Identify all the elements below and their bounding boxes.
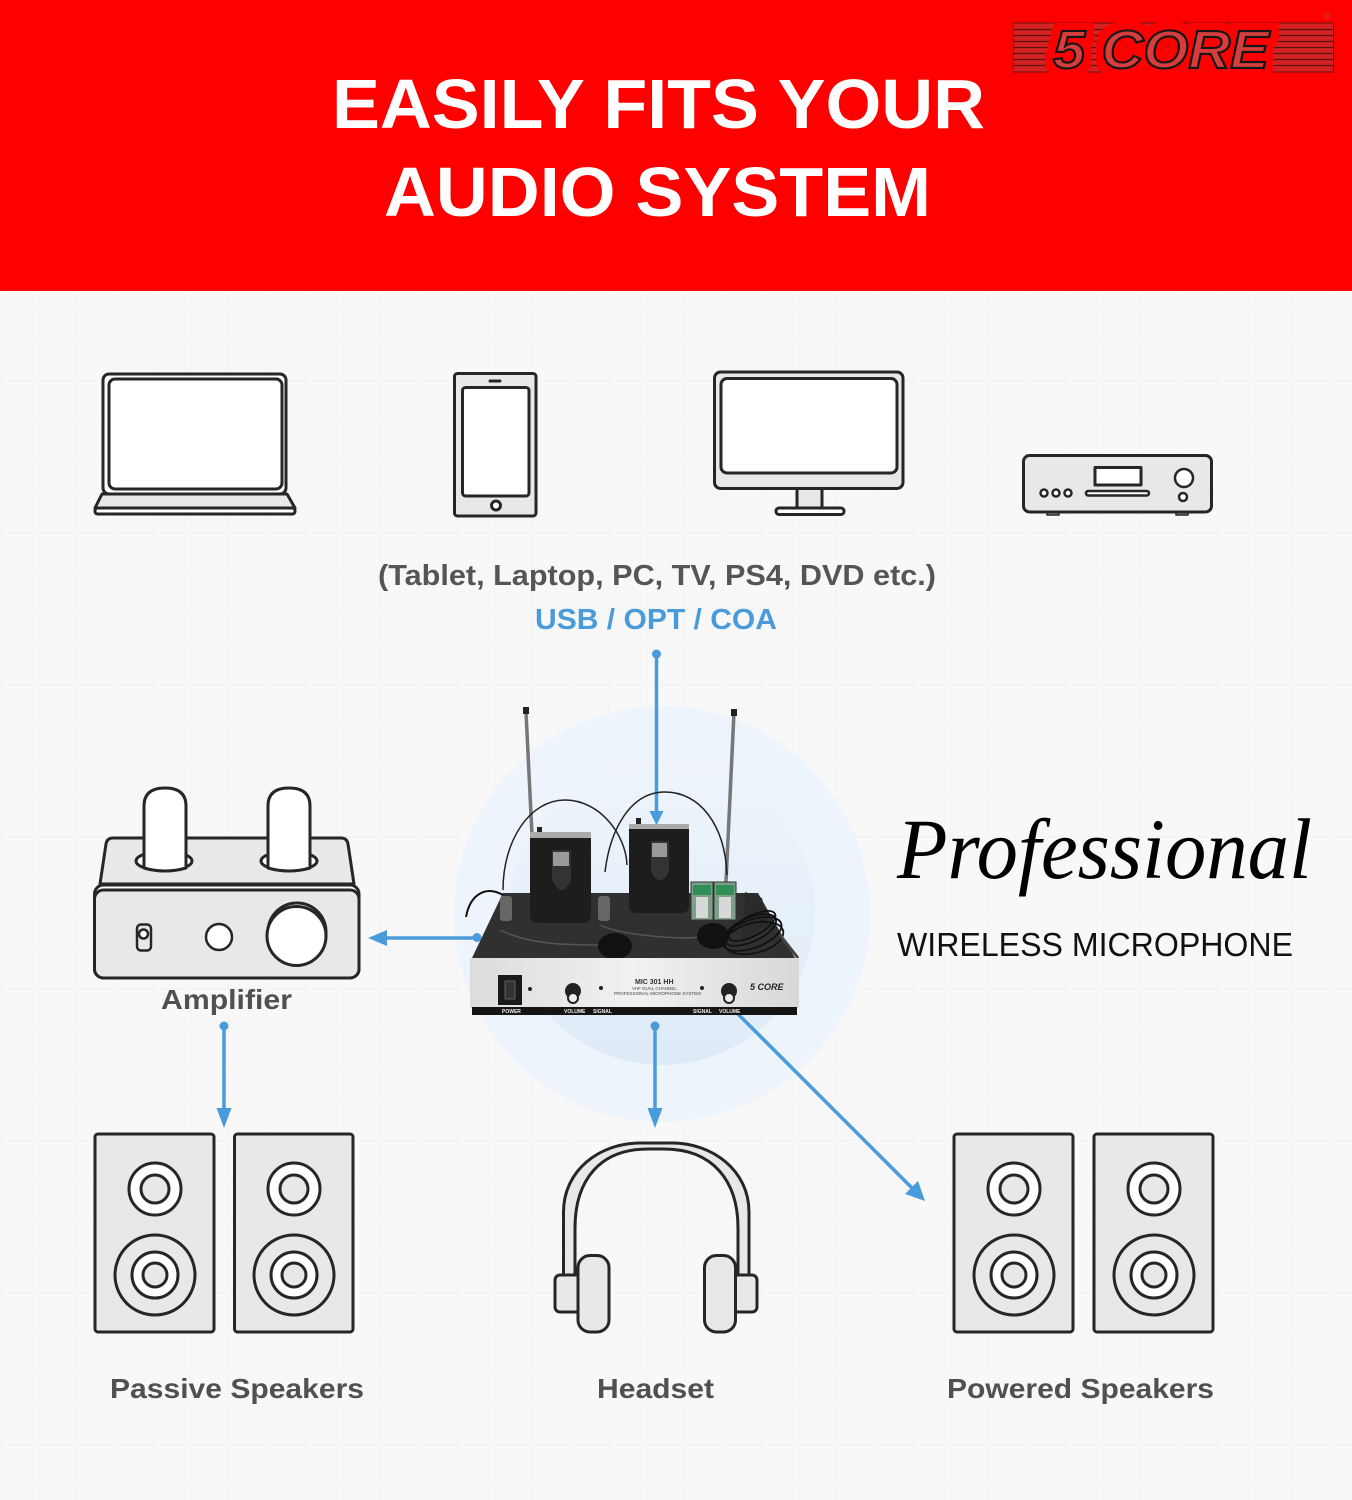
icon: laptop [95, 374, 295, 514]
arrowhead over transmitter [650, 811, 664, 825]
receiver front panel [470, 958, 799, 1015]
receiver front panel: POWER [502, 1009, 521, 1015]
title: EASILY FITS YOUR [332, 65, 985, 143]
receiver front panel: VHF DUAL CHANNEL [632, 986, 677, 991]
bodypack transmitter left [530, 827, 591, 923]
receiver front panel: SIGNAL [693, 1009, 712, 1015]
receiver product photo [466, 707, 799, 1015]
receiver front panel: 5 CORE [750, 982, 785, 992]
blue glow circle behind receiver [454, 706, 870, 1122]
icon: powered speakers [954, 1134, 1213, 1332]
right speaker [1094, 1134, 1213, 1332]
arrow: source to receiver [650, 650, 664, 825]
logo: 5 Core: ® [1323, 11, 1331, 23]
icon: passive speakers [95, 1134, 353, 1332]
tagline: Professional: Professional [896, 801, 1312, 897]
arrow: amplifier to passive speakers [216, 1022, 232, 1128]
icon: monitor [714, 372, 903, 514]
label: headset: Headset [597, 1373, 714, 1404]
icon: headset [555, 1143, 757, 1332]
label: passive speakers: Passive Speakers [110, 1373, 364, 1404]
right speaker [234, 1134, 353, 1332]
receiver top [472, 893, 795, 958]
header banner [0, 0, 1352, 291]
title [332, 65, 985, 231]
icon: DVD player [1024, 456, 1212, 515]
left speaker [95, 1134, 214, 1332]
logo: 5 Core: 5 CORE [1053, 20, 1271, 80]
antennas [523, 707, 737, 882]
icon: amplifier [94, 788, 359, 978]
tagline: wireless microphone: WIRELESS MICROPHONE [897, 926, 1293, 963]
receiver front panel: MIC 301 HH [635, 979, 674, 986]
receiver front panel: VOLUME [564, 1009, 586, 1015]
bodypack transmitter right [629, 818, 689, 913]
receiver front panel: SIGNAL [593, 1009, 612, 1015]
arrow: receiver to amplifier [368, 930, 482, 946]
logo: 5 Core [1013, 11, 1334, 80]
device list caption: (Tablet, Laptop, PC, TV, PS4, DVD etc.) [378, 560, 936, 592]
left speaker [954, 1134, 1073, 1332]
amplifier label: Amplifier [161, 984, 292, 1015]
receiver front panel: VOLUME [719, 1009, 741, 1015]
arrow: receiver to headset [648, 1022, 662, 1128]
icon: tablet [454, 374, 536, 516]
batteries [691, 882, 736, 920]
title: AUDIO SYSTEM [384, 153, 931, 231]
headset microphones [466, 792, 729, 959]
arrow: receiver to powered speakers [736, 1012, 925, 1201]
connection types caption: USB / OPT / COA [535, 604, 777, 636]
label: powered speakers: Powered Speakers [947, 1373, 1214, 1404]
cable and adapter [718, 892, 798, 960]
receiver front panel: PROFESSIONAL MICROPHONE SYSTEM [614, 991, 701, 996]
